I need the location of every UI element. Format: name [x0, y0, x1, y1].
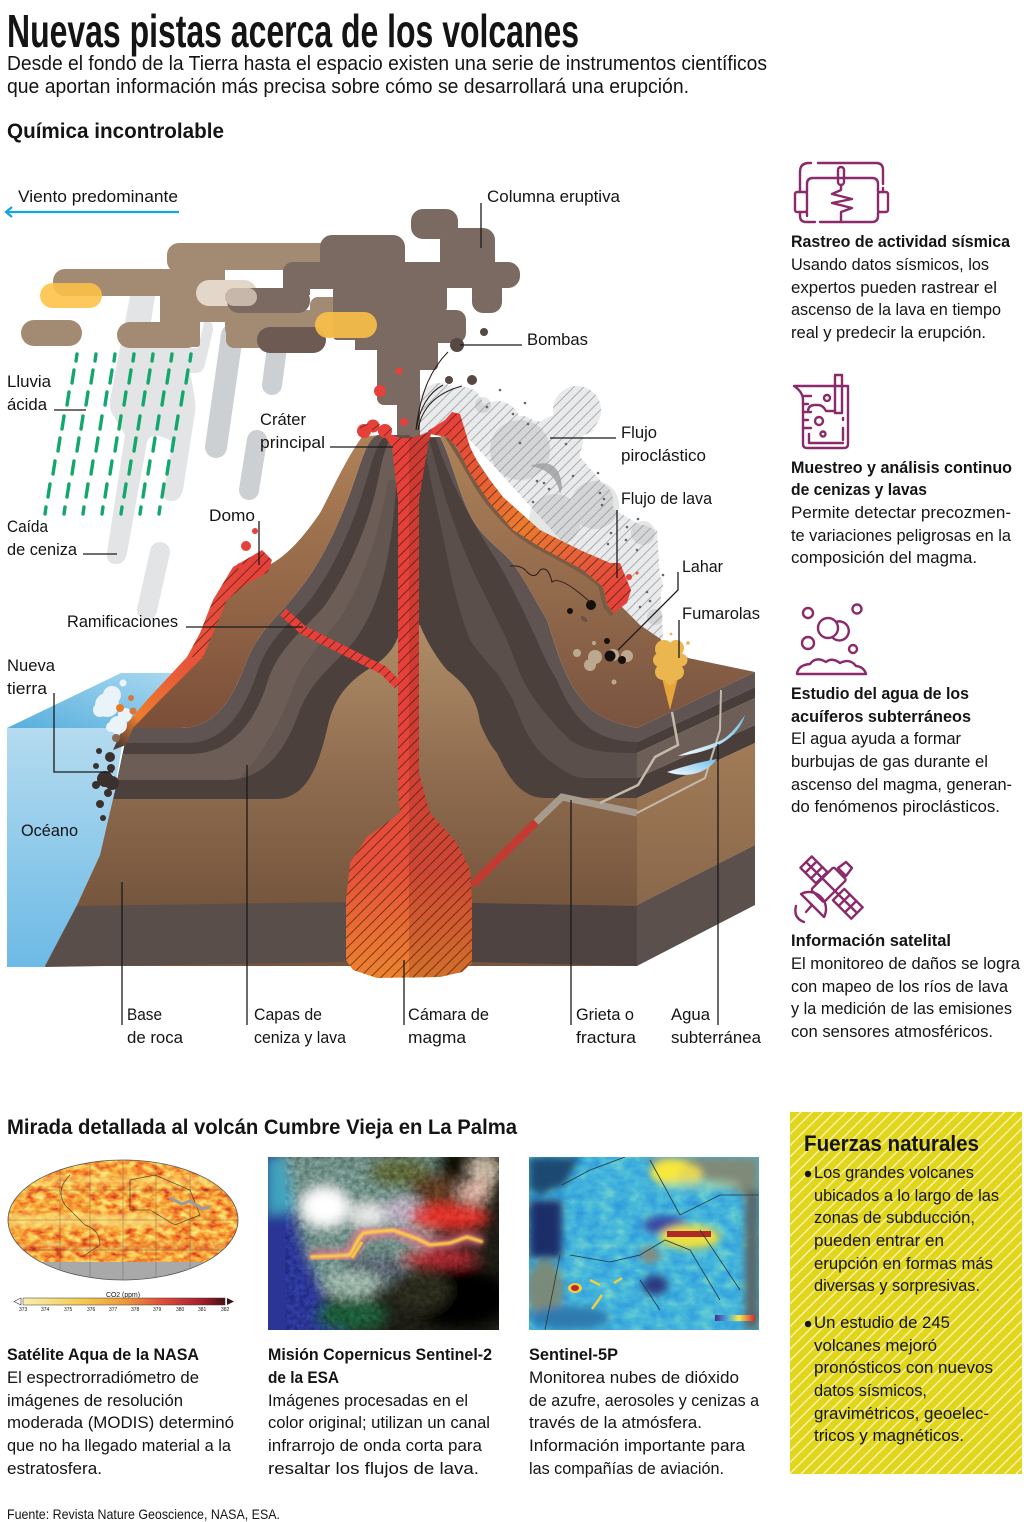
text: Sentinel-5P: Información importante para [529, 1436, 746, 1455]
text: Aqua [7, 1345, 234, 1478]
chart: global CO2 map: 373 [19, 1307, 28, 1313]
lava branch ramificaciones [283, 612, 398, 685]
text: información satelital: El monitoreo de daños se logra [791, 954, 1021, 973]
text: muestreo y análisis: de cenizas y lavas [791, 480, 927, 499]
text: estudio del agua: El agua ayuda a formar [791, 729, 961, 748]
label: bombas [460, 330, 588, 349]
text: Sentinel-2: Imágenes procesadas en el [268, 1391, 468, 1410]
label: viento predominante: Viento predominante [18, 187, 178, 206]
text: Sentinel-2: infrarrojo de onda corta para [268, 1436, 483, 1455]
text: Sentinel-2: color original; utilizan un canal [268, 1413, 490, 1432]
bullet 2 [805, 1313, 993, 1445]
text: estudio del agua: do fenómenos piroclásticos. [791, 797, 1000, 816]
icon: seismograph [795, 163, 888, 222]
text: estudio del agua: Estudio del agua de los [791, 684, 969, 703]
text: estudio del agua [791, 684, 1012, 816]
text: Aqua: estratosfera. [7, 1459, 102, 1478]
wind arrow [6, 207, 179, 217]
text: Sentinel-2: Misión Copernicus Sentinel-2 [268, 1345, 492, 1364]
label: fumarolas [679, 604, 760, 658]
label: flujo de lava: Flujo de lava [621, 489, 713, 508]
chart: global CO2 map: 378 [131, 1307, 140, 1313]
chart: global CO2 map [8, 1160, 238, 1313]
bullet 2: volcanes mejoró [814, 1336, 937, 1355]
label: flujo de lava [617, 489, 713, 578]
chart: global CO2 map: 377 [109, 1307, 118, 1313]
text: Sentinel-5P: de azufre, aerosoles y cenizas a [529, 1391, 760, 1410]
text: Sentinel-2: resaltar los flujos de lava. [268, 1459, 479, 1478]
new land, steam and rocks [92, 680, 136, 821]
text: Aqua: Satélite Aqua de la NASA [7, 1345, 199, 1364]
icon: beaker [794, 375, 848, 448]
chart: global CO2 map: 375 [64, 1307, 73, 1313]
bullet 1: erupción en formas más [814, 1254, 993, 1273]
label: base de roca: Base [127, 1005, 162, 1024]
text: información satelital: con mapeo de los ríos de lava [791, 977, 1009, 996]
label: cráter principal: Cráter [260, 410, 306, 429]
feeder dike and fracture [472, 690, 721, 885]
label: agua subterránea: Agua [671, 1005, 711, 1024]
subtitle: que aportan información más precisa sobre cómo se desarrollará una erupción. [7, 76, 689, 98]
label: agua subterránea [671, 744, 762, 1047]
label: flujo piroclástico: piroclástico [621, 446, 706, 465]
text: Aqua: moderada (MODIS) determinó [7, 1413, 234, 1432]
label: caída de ceniza [7, 517, 117, 559]
chart: global CO2 map: CO2 (ppm) [106, 1292, 140, 1299]
bullet 1: zonas de subducción, [814, 1208, 975, 1227]
label: domo: Domo [209, 506, 255, 525]
ocean [7, 673, 175, 967]
label: columna eruptiva: Columna eruptiva [487, 187, 621, 206]
ash cloud drifting with the wind [21, 235, 405, 353]
underground water lenses [667, 715, 745, 775]
acid rain [45, 354, 191, 514]
chart: global CO2 map: 381 [198, 1307, 207, 1313]
text: información satelital: Información satelital [791, 931, 951, 950]
label: nueva tierra [7, 656, 113, 772]
bullet 1: pueden entrar en [814, 1231, 944, 1250]
base rock front [45, 625, 637, 967]
icon: satellite [795, 851, 868, 924]
text: muestreo y análisis [791, 458, 1012, 567]
volcano flank surface right [440, 425, 755, 728]
label: flujo piroclástico [550, 423, 706, 465]
photo: Sentinel-2 lava flow [268, 1157, 499, 1330]
label: cámara de magma: magma [408, 1028, 467, 1047]
text: Aqua: El espectrorradiómetro de [7, 1368, 199, 1387]
label: lluvia ácida: Lluvia [7, 372, 52, 391]
lava flow right [428, 412, 639, 615]
panel heading: Fuerzas naturales [804, 1131, 979, 1156]
text: Sentinel-2 [268, 1345, 492, 1478]
label: base de roca: de roca [127, 1028, 184, 1047]
source: Fuente: Revista Nature Geoscience, NASA, ESA. [7, 1506, 280, 1522]
label: grieta o fractura: fractura [576, 1028, 637, 1047]
text: información satelital: y la medición de las emisiones [791, 999, 1012, 1018]
chart: global CO2 map: 380 [176, 1307, 185, 1313]
label: capas de ceniza y lava [247, 765, 347, 1047]
bullet 2: Un estudio de 245 [814, 1313, 950, 1332]
text: estudio del agua: acuíferos subterráneos [791, 707, 971, 726]
eruption column [370, 209, 520, 445]
label: flujo piroclástico: Flujo [621, 423, 657, 442]
label: grieta o fractura: Grieta o [576, 1005, 634, 1024]
lahar debris [510, 566, 633, 684]
chart: global CO2 map: 374 [41, 1307, 50, 1313]
label: lluvia ácida: ácida [7, 395, 48, 414]
text: rastreo de actividad sísmica: ascenso de la lava en tiempo [791, 300, 1001, 319]
photo: Sentinel-5P map [527, 1157, 759, 1330]
label: caída de ceniza: de ceniza [7, 540, 78, 559]
text: Sentinel-5P [529, 1345, 760, 1478]
subtitle [7, 53, 767, 98]
label: capas de ceniza y lava: Capas de [254, 1005, 322, 1024]
chart: global CO2 map: 382 [221, 1307, 230, 1313]
text: rastreo de actividad sísmica: real y predecir la erupción. [791, 323, 986, 342]
text: información satelital: con sensores atmosféricos. [791, 1022, 993, 1041]
text: Sentinel-5P: través de la atmósfera. [529, 1413, 702, 1432]
bullet 1: ubicados a lo largo de las [814, 1186, 999, 1205]
bullet 2: pronósticos con nuevos [814, 1358, 993, 1377]
text: Sentinel-2: de la ESA [268, 1368, 339, 1387]
label: nueva tierra: Nueva [7, 656, 56, 675]
text: Aqua: imágenes de resolución [7, 1391, 183, 1410]
fumarole [653, 633, 690, 710]
label: cráter principal [260, 410, 393, 452]
title: Nuevas pistas acerca de los volcanes [7, 5, 579, 57]
text: rastreo de actividad sísmica: expertos pueden rastrear el [791, 278, 997, 297]
label: base de roca [122, 882, 184, 1047]
subtitle: Desde el fondo de la Tierra hasta el espacio existen una serie de instrumentos científicos [7, 53, 767, 75]
chart: global CO2 map: 379 [153, 1307, 162, 1313]
ash fall streaks [107, 296, 280, 610]
right face of the crust block [637, 672, 755, 966]
label: domo [209, 506, 259, 565]
volcano flank surface left [128, 435, 378, 728]
text: Sentinel-5P: las compañías de aviación. [529, 1459, 724, 1478]
chart: global CO2 map: 376 [87, 1307, 96, 1313]
label: columna eruptiva [481, 187, 621, 248]
section heading: cumbre vieja: Mirada detallada al volcán Cumbre Vieja en La Palma [7, 1116, 517, 1139]
yellow ash pill over column [315, 312, 377, 338]
text: muestreo y análisis: te variaciones peligrosas en la [791, 526, 1012, 545]
label: ramificaciones: Ramificaciones [67, 612, 178, 631]
text: muestreo y análisis: Muestreo y análisis continuo [791, 458, 1012, 477]
text: muestreo y análisis: composición del magma. [791, 548, 977, 567]
panel: fuerzas naturales [790, 1112, 1022, 1474]
text: estudio del agua: ascenso del magma, generan- [791, 775, 1012, 794]
icon: bubbles [797, 604, 866, 674]
lava flow left and dome [113, 528, 272, 750]
label: nueva tierra: tierra [7, 679, 48, 698]
label: bombas: Bombas [527, 330, 588, 349]
label: lahar [618, 557, 723, 650]
bullet 1: diversas y sorpresivas. [814, 1276, 980, 1295]
label: agua subterránea: subterránea [671, 1028, 762, 1047]
label: fumarolas: Fumarolas [682, 604, 760, 623]
label: cámara de magma [404, 960, 489, 1047]
label: lahar: Lahar [682, 557, 723, 576]
text: Sentinel-5P: Sentinel-5P [529, 1345, 618, 1364]
text: estudio del agua: burbujas de gas durante el [791, 752, 988, 771]
text: rastreo de actividad sísmica: Rastreo de actividad sísmica [791, 232, 1011, 251]
bullet 1: Los grandes volcanes [814, 1163, 974, 1182]
bullet 2: datos sísmicos, [814, 1381, 927, 1400]
pyroclastic flow cloud [416, 383, 664, 640]
text: muestreo y análisis: Permite detectar precozmen- [791, 503, 1011, 522]
magma conduit and chamber [346, 420, 472, 978]
bullet 2: gravimétricos, geoelec- [814, 1404, 989, 1423]
bullet 1 [805, 1163, 999, 1295]
label: caída de ceniza: Caída [7, 517, 48, 536]
text: información satelital [791, 931, 1021, 1041]
text: rastreo de actividad sísmica [791, 232, 1011, 342]
text: rastreo de actividad sísmica: Usando datos sísmicos, los [791, 255, 989, 274]
label: grieta o fractura [571, 800, 637, 1047]
label: cráter principal: principal [260, 433, 325, 452]
section heading: química: Química incontrolable [7, 120, 224, 143]
label: lluvia ácida [7, 372, 86, 414]
label: capas de ceniza y lava: ceniza y lava [254, 1028, 347, 1047]
text: Sentinel-5P: Monitorea nubes de dióxido [529, 1368, 739, 1387]
label: cámara de magma: Cámara de [408, 1005, 489, 1024]
bullet 2: tricos y magnéticos. [814, 1426, 964, 1445]
volcanic bombs [374, 328, 488, 430]
text: Aqua: que no ha llegado material a la [7, 1436, 232, 1455]
ash and lava layers [113, 435, 637, 800]
label: océano: Océano [21, 821, 78, 840]
